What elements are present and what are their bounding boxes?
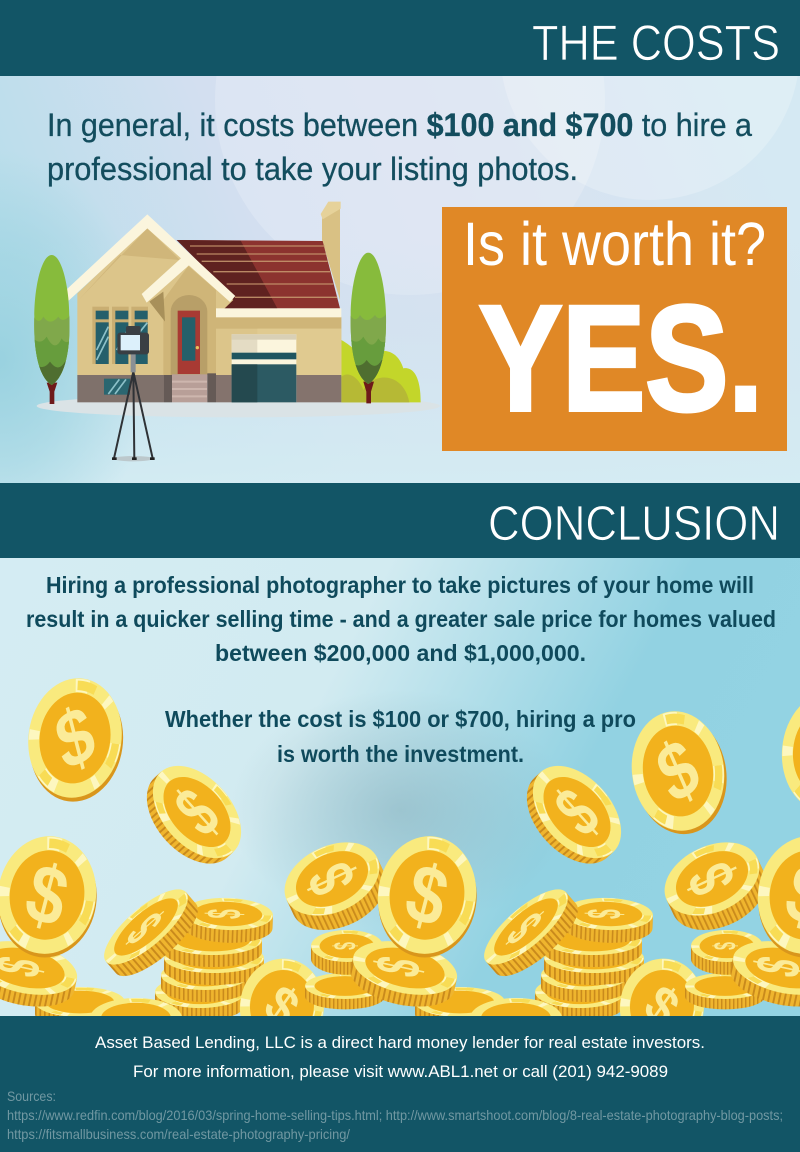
header bar: conclusion [0, 483, 800, 558]
right tree [350, 252, 386, 404]
coin pile: centre: $ [709, 942, 743, 950]
coin pile: centre [350, 836, 764, 1016]
section background: costs [0, 76, 800, 483]
company statement: For more information, please visit www.ABL1.net or call (201) 942-9089 [133, 1062, 668, 1081]
coin: tumbling right [526, 766, 622, 864]
coin pile: left: $ [114, 901, 174, 956]
callout: is it worth it [442, 207, 787, 451]
company statement: Asset Based Lending, LLC is a direct hard money lender for real estate investors. [95, 1033, 705, 1052]
coin: upper right: $ [645, 720, 711, 822]
coin: tumbling right: $ [540, 773, 614, 852]
coin pile: centre: $ [634, 973, 689, 1041]
front door [171, 295, 207, 375]
conclusion text: between $200,000 and $1,000,000. [215, 640, 586, 666]
windows [92, 307, 148, 364]
conclusion text: Hiring a professional photographer to take pictures of your home will [46, 572, 754, 598]
coin pile: left: $ [17, 845, 77, 946]
left tree [34, 255, 70, 404]
coin: upper left: $ [47, 688, 103, 788]
coin: upper left [28, 678, 124, 802]
coin: right edge [782, 706, 800, 802]
intro text: professional to take your listing photos. [47, 151, 578, 187]
intro text [47, 107, 753, 187]
conclusion text: is worth the investment. [277, 741, 524, 767]
header bar: the costs [0, 0, 800, 76]
sources [7, 1088, 783, 1142]
section background: conclusion [0, 558, 800, 1016]
coin pile: centre: $ [494, 901, 554, 956]
coin pile: left: $ [254, 973, 309, 1041]
coin pile: left: $ [196, 908, 251, 920]
coin pile: centre: $ [576, 908, 631, 920]
bush [341, 340, 421, 402]
tripod and camera [112, 326, 155, 461]
callout: is it worth it: Is it worth it? [463, 210, 766, 278]
coin pile: left: $ [292, 853, 370, 906]
illustration: house with camera on tripod [32, 202, 440, 461]
house body [67, 214, 341, 375]
coin: tumbling left [146, 766, 242, 864]
coin pile: centre: $ [397, 845, 457, 946]
coin pile: centre: $ [361, 951, 435, 982]
intro text: In general, it costs between $100 and $700 to hire a [47, 107, 753, 143]
coin pile: centre: $ [672, 853, 750, 906]
conclusion text [26, 572, 776, 767]
conclusion text: Whether the cost is $100 or $700, hiring a pro [165, 706, 636, 732]
coin: tumbling left: $ [160, 773, 234, 852]
coin: upper right [632, 711, 727, 834]
coin pile: left [0, 836, 384, 1016]
illustration: falling gold coins [0, 678, 800, 1016]
footer bar [0, 1016, 800, 1152]
coin pile: right edge [730, 837, 800, 1006]
chimney [321, 202, 341, 300]
garage door [232, 334, 296, 402]
sources: Sources: [7, 1088, 56, 1104]
sources: https://fitsmallbusiness.com/real-estate-photography-pricing/ [7, 1126, 350, 1142]
foundation [77, 373, 341, 402]
coin pile: left: $ [329, 942, 363, 950]
company statement [95, 1033, 705, 1081]
ground shadow [37, 395, 440, 417]
